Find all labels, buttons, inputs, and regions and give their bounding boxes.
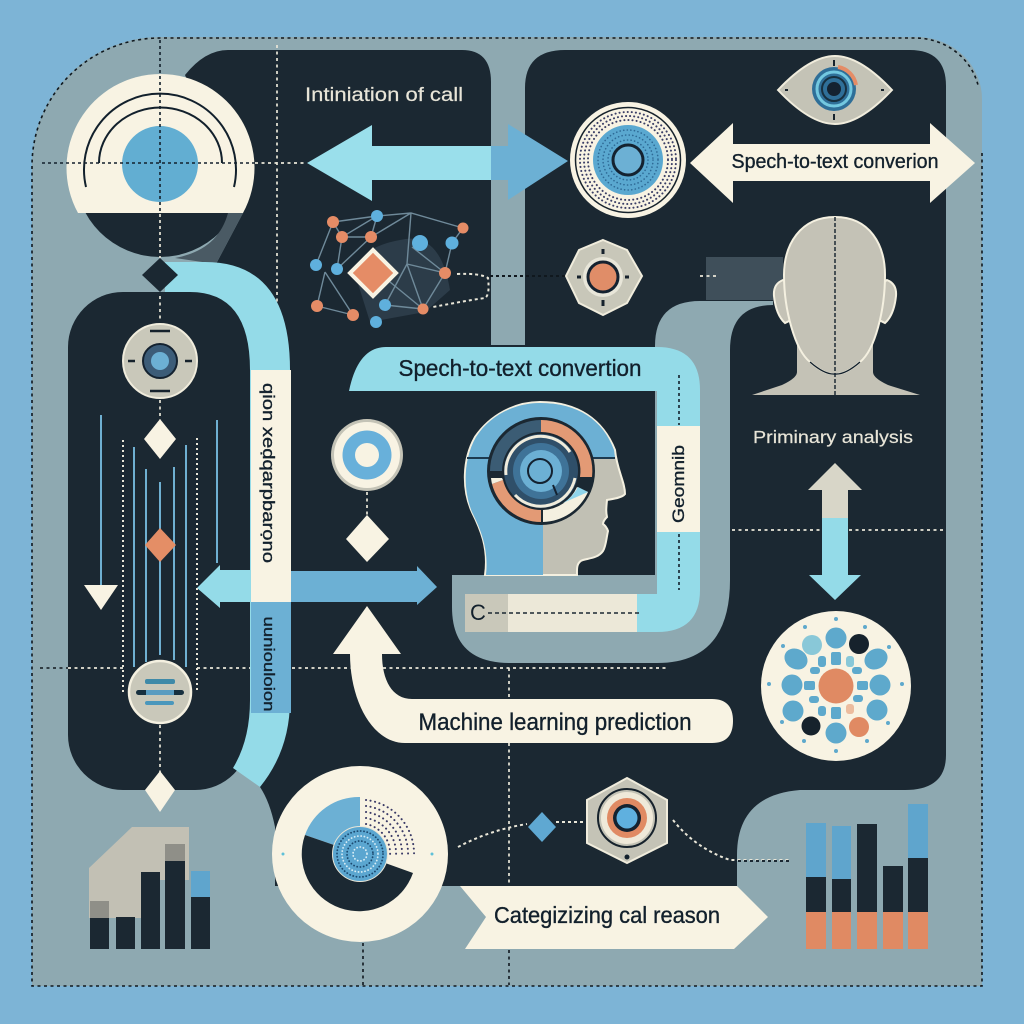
panel: dark flow field [185, 50, 946, 886]
label band: Geomnib [657, 426, 700, 532]
icon: small diamond and dotted link [458, 812, 584, 847]
cream bar below head: C [470, 600, 486, 625]
arrow: double arrow top [307, 124, 568, 201]
icon: head silhouette right [752, 217, 920, 395]
cream bar below head [465, 594, 640, 632]
chart: bottom-right stacked bars [806, 804, 928, 949]
icon: lower bars node [129, 661, 191, 723]
icon: cream diamond [144, 419, 176, 459]
icon: radial dot disc [761, 611, 911, 761]
icon: hexagon node [587, 778, 790, 863]
heading: initiation of call: Intiniation of call [305, 85, 463, 106]
heading: Speech-to-text conversion centre: Spech-to-text convertion [398, 355, 642, 381]
panel: slate rectangle [706, 257, 783, 300]
panel: speech-to-text curved band [349, 347, 700, 632]
icon: upper ring node [123, 324, 197, 398]
icon: small ring [331, 419, 403, 491]
icon: network graph [310, 210, 566, 328]
icon: cream triangle [84, 585, 118, 610]
chart: bottom donut [272, 766, 448, 942]
icon: top-left circle with arcs [42, 40, 255, 258]
arrow: vertical double arrow [808, 463, 862, 600]
panel: grey connector around head [452, 301, 773, 663]
icon: dotted eye disc [570, 102, 686, 218]
panel: light blue curved band left [165, 262, 291, 787]
icon: eye top right [778, 56, 892, 124]
panel: dark left column [68, 292, 250, 790]
icon: cream diamond [346, 515, 389, 562]
arrow: machine learning curved arrow: Machine learning prediction [418, 709, 692, 736]
arrow: speech-to-text cream arrow: Spech-to-text converion [732, 151, 938, 173]
icon: central profile head [465, 402, 625, 575]
stems [101, 415, 217, 667]
label band: cream vertical text [251, 370, 291, 602]
icon: cream diamond lower [145, 771, 175, 812]
arrow: categorizing call reason [460, 886, 768, 949]
text: primary analysis: Priminary analysis [753, 427, 913, 447]
chart: bottom-left bars [89, 827, 210, 949]
label band: Geomnib: Geomnib [669, 445, 688, 523]
label band: cream vertical text: qion xeḍqarpbarọno [259, 383, 278, 563]
icon: dark diamond [142, 258, 178, 292]
arrow: horizontal blue arrow centre [197, 565, 437, 608]
arrow: categorizing call reason: Categizizing cal reason [494, 902, 720, 928]
label band: blue vertical text: uuniouloion [260, 616, 277, 712]
left panel: node and stem diagram [84, 258, 217, 812]
label band: blue vertical text [251, 602, 291, 713]
arrow: speech-to-text cream arrow [690, 123, 975, 203]
icon: octagon node [566, 240, 642, 315]
icon: orange diamond [145, 528, 176, 562]
arrow: machine learning curved arrow [333, 606, 733, 743]
shadow beneath top-left icon [175, 213, 243, 264]
panel: dark circle under top-left icon [75, 87, 245, 257]
